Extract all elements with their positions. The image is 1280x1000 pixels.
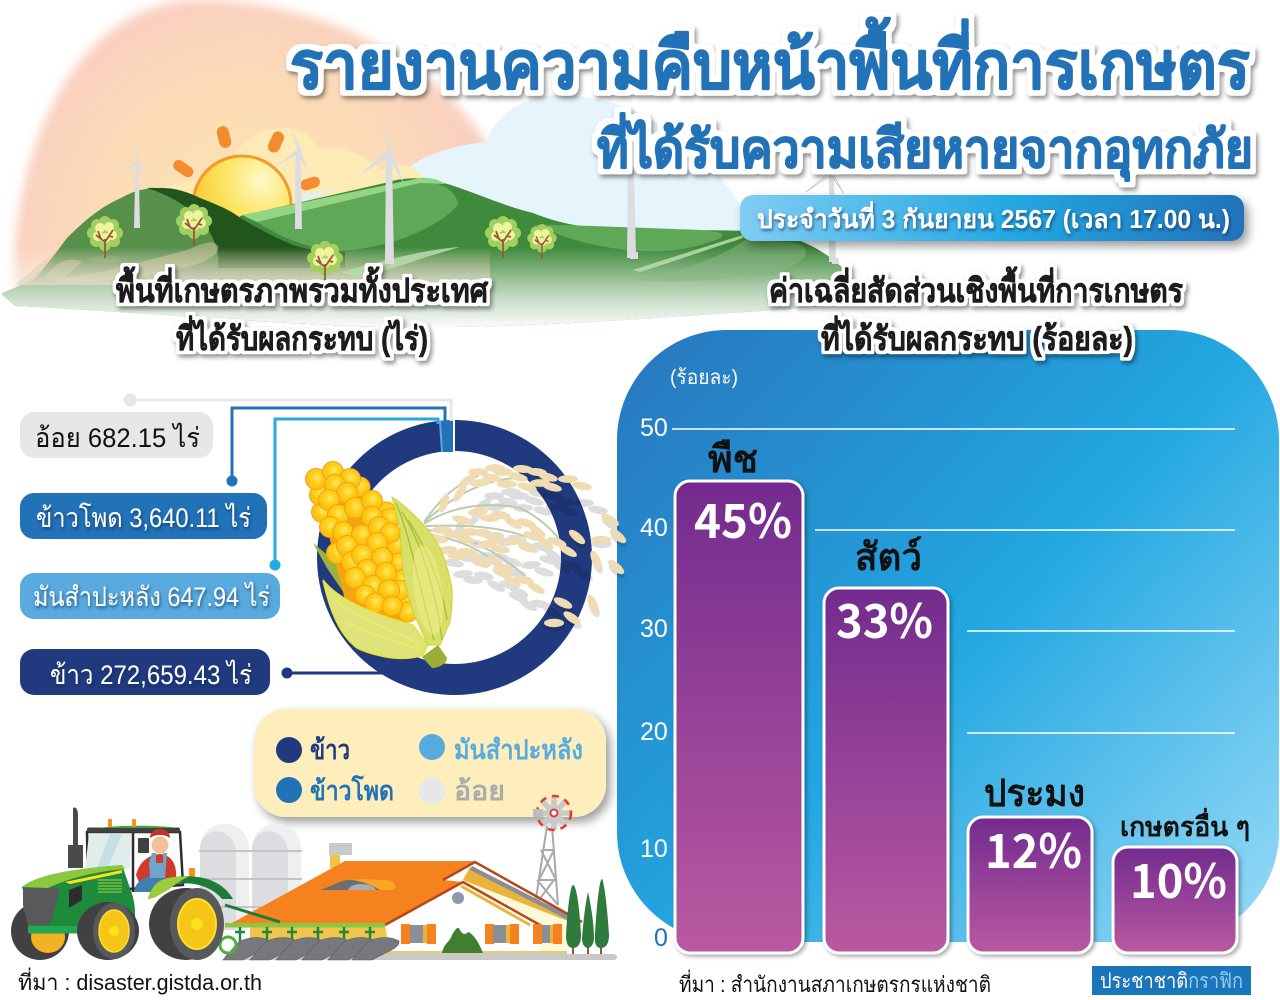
axis labels: 0: [654, 924, 668, 952]
bar: livestock 33%: [824, 536, 948, 953]
leader lines: [124, 394, 451, 678]
date pill: [740, 195, 1244, 241]
sun: [193, 156, 291, 254]
ground: [225, 954, 617, 960]
bar: fishery 12%: ประมง: [984, 773, 1085, 815]
heading: left: [116, 266, 489, 357]
legend: มันสำปะหลัง: [454, 735, 583, 765]
logo: ประชาชาติกราฟิก: [1100, 970, 1243, 993]
bar: crops 45%: พืช: [708, 439, 758, 481]
tractor: [11, 807, 233, 960]
heading: left: ที่ได้รับผลกระทบ (ไร่): [176, 315, 428, 357]
label: corn: [20, 493, 267, 539]
legend: อ้อย: [454, 776, 505, 806]
label: sugarcane: [20, 412, 213, 458]
axis unit label: (ร้อยละ): [670, 367, 738, 389]
landscape illustration: [0, 0, 900, 335]
cream cloud: [145, 128, 480, 240]
axis labels: 10: [640, 835, 668, 863]
main title: [290, 16, 1253, 182]
fender: [148, 876, 233, 899]
bar: other agriculture 10%: 10%: [1130, 843, 1227, 912]
heading: right: ที่ได้รับผลกระทบ (ร้อยละ): [821, 315, 1133, 357]
axis labels: [640, 414, 668, 952]
bar: other agriculture 10%: เกษตรอื่น ๆ: [1120, 807, 1250, 842]
heading: right: ค่าเฉลี่ยสัดส่วนเชิงพื้นที่การเกษตร: [769, 266, 1183, 309]
bar: livestock 33%: สัตว์: [855, 536, 922, 579]
exhaust: [68, 807, 83, 868]
legend: [254, 709, 606, 817]
source: right: ที่มา : สำนักงานสภาเกษตรกรแห่งชาติ: [679, 969, 991, 997]
panel: bar chart background: [617, 330, 1279, 942]
legend: ข้าว: [310, 735, 350, 765]
label: sugarcane: อ้อย 682.15 ไร่: [35, 423, 200, 453]
pale blue cloud: [395, 95, 746, 245]
middle wheel: [77, 902, 139, 960]
sun rays: [171, 125, 321, 192]
bar: fishery 12%: [968, 773, 1092, 953]
axis labels: 40: [640, 514, 668, 542]
plow: [220, 905, 399, 960]
silos: [199, 824, 302, 930]
heading: left: พื้นที่เกษตรภาพรวมทั้งประเทศ: [116, 266, 489, 309]
peach sky dome: [14, 0, 500, 288]
axis labels: 50: [640, 414, 668, 442]
label: rice: [20, 649, 270, 695]
cab: [87, 832, 183, 892]
label: corn: ข้าวโพด 3,640.11 ไร่: [36, 503, 251, 533]
trees: [87, 204, 557, 283]
label: cassava: มันสำปะหลัง 647.94 ไร่: [33, 582, 270, 612]
axis labels: 30: [640, 615, 668, 643]
bar: fishery 12%: 12%: [985, 813, 1082, 882]
icon: rice stalk: [424, 464, 629, 631]
bar: crops 45%: [675, 439, 803, 953]
farmer: [134, 829, 176, 892]
hills: [0, 178, 900, 335]
turbines: [118, 120, 844, 264]
windmill: [533, 796, 571, 905]
icon: corn: [306, 462, 452, 668]
heading: right: [769, 266, 1183, 357]
axis grid lines: [672, 429, 1235, 733]
house: [232, 843, 582, 954]
hood: [22, 865, 135, 926]
main wheel: [149, 888, 223, 960]
label: cassava: [20, 573, 280, 619]
donut chart: [332, 419, 576, 680]
cypress trees: [566, 879, 609, 954]
legend: ข้าวโพด: [310, 774, 394, 806]
bar: other agriculture 10%: [1113, 807, 1250, 953]
date pill: ประจำวันที่ 3 กันยายน 2567 (เวลา 17.00 น.): [757, 200, 1230, 234]
source: left: ที่มา : disaster.gistda.or.th: [18, 967, 262, 995]
label: rice: ข้าว 272,659.43 ไร่: [50, 660, 252, 690]
bar: livestock 33%: 33%: [836, 583, 933, 652]
bar: crops 45%: 45%: [694, 483, 792, 552]
far wheel: [11, 902, 69, 960]
farm illustration: [11, 796, 617, 960]
axis labels: 20: [640, 718, 668, 746]
